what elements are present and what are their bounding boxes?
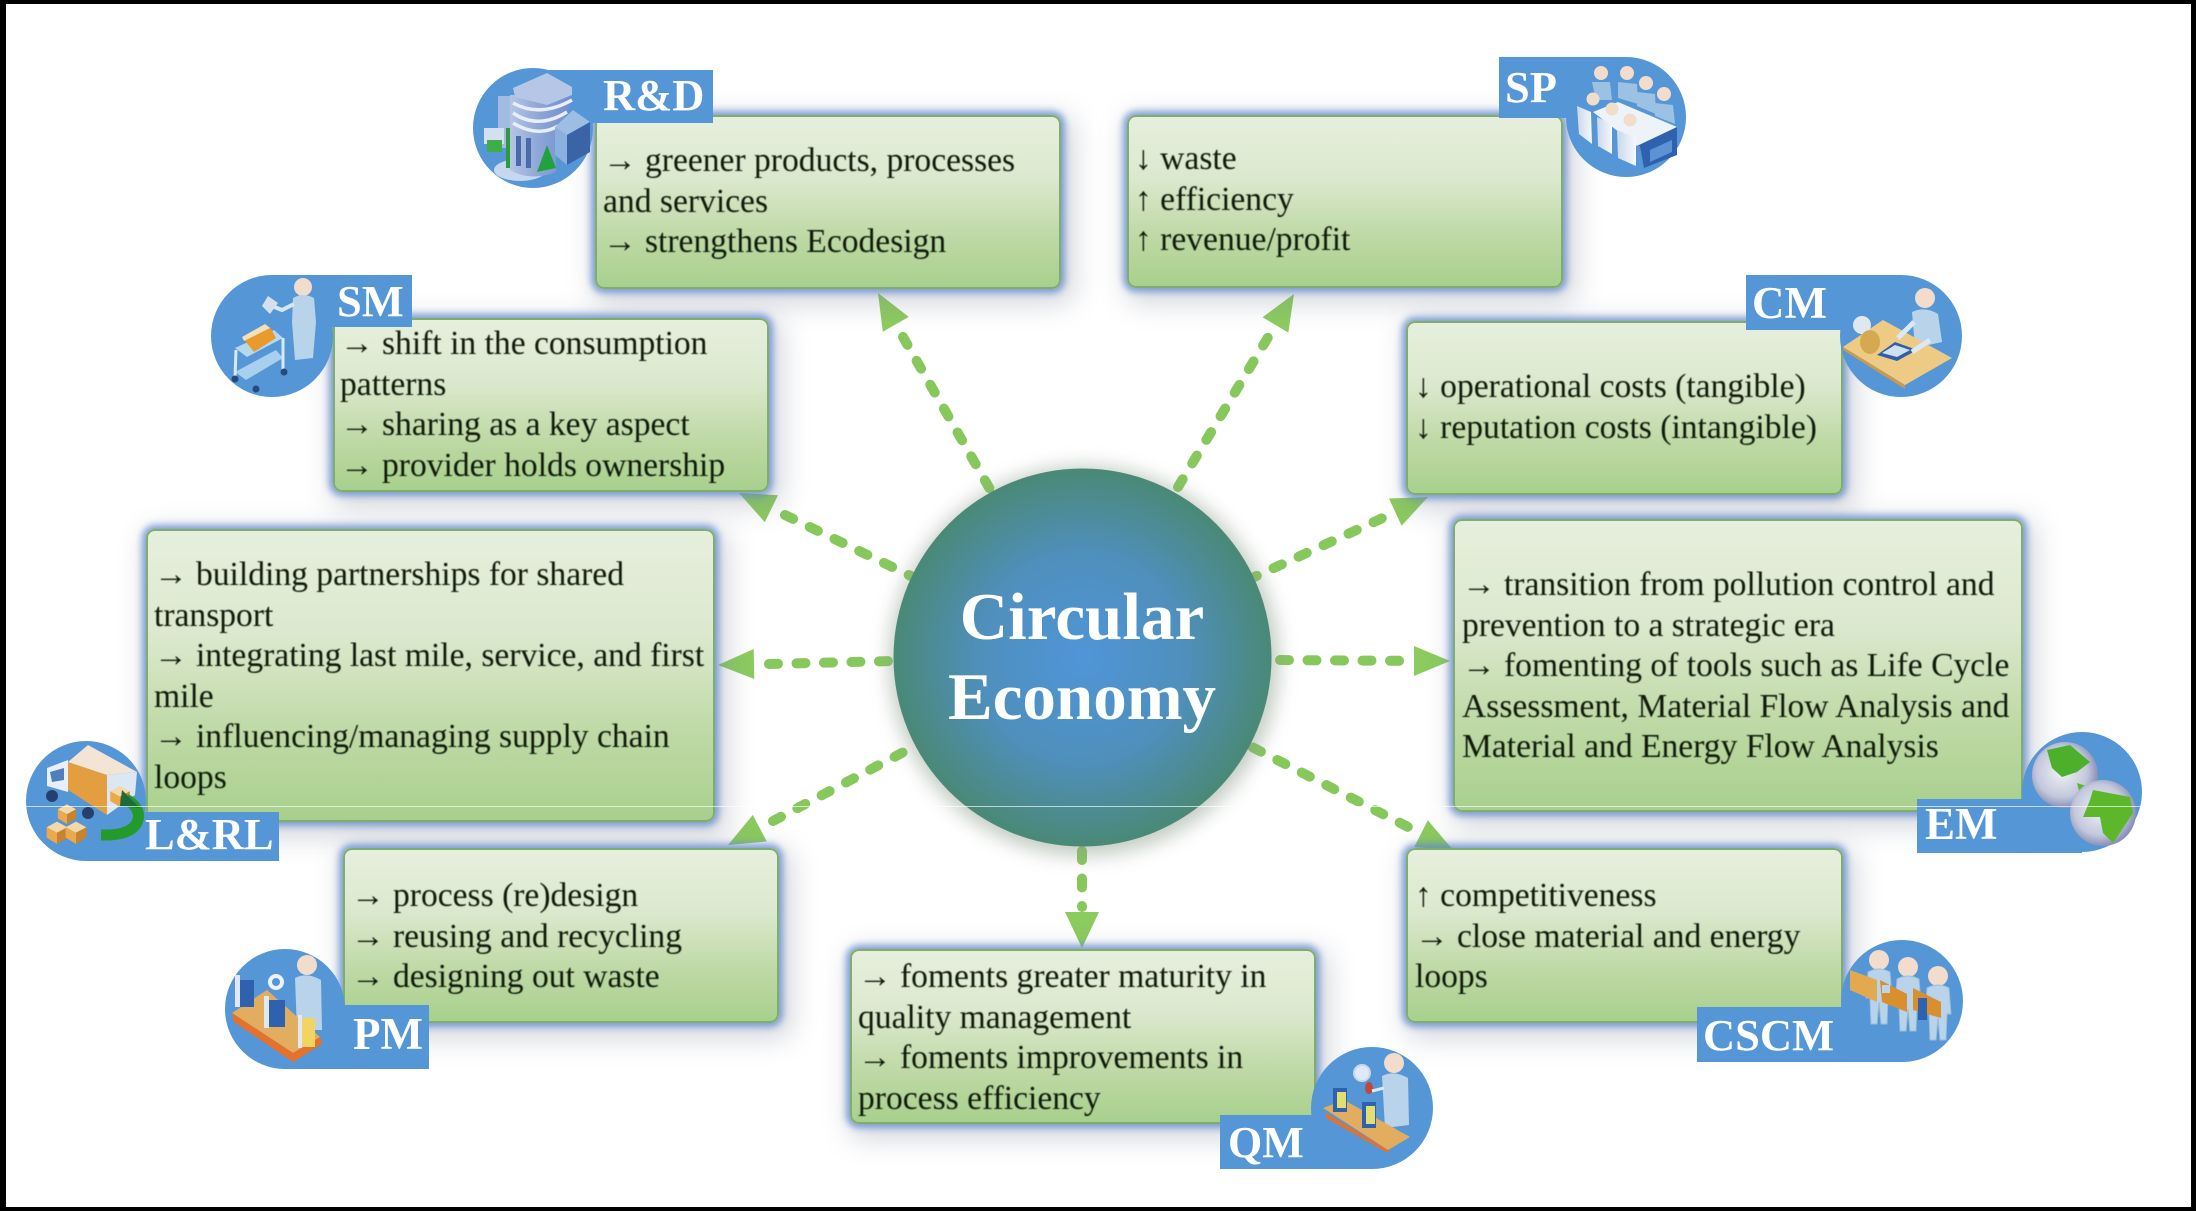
text: SM effects: patterns xyxy=(340,366,446,403)
panel: R&D xyxy=(595,115,1061,289)
text: R&D effects: and services xyxy=(603,183,768,220)
panel: EM xyxy=(1453,519,2023,812)
text: EM effects: → transition from pollution control and xyxy=(1462,566,1995,603)
label: CSCM: CSCM xyxy=(1703,1010,1834,1060)
text: SM effects: → shift in the consumption xyxy=(340,325,707,362)
panel: L&RL xyxy=(146,529,715,822)
text: SP effects: ↑ efficiency xyxy=(1135,181,1294,218)
text: SM effects: → provider holds ownership xyxy=(340,447,725,484)
text: CM effects: ↓ operational costs (tangible) xyxy=(1415,368,1806,405)
centre circle: Circular Economy: Circular xyxy=(960,580,1204,654)
text: L&RL effects: → integrating last mile, service, and first xyxy=(154,637,704,674)
text: PM effects: → process (re)design xyxy=(351,877,638,914)
text: EM effects xyxy=(1462,566,2010,765)
text: CSCM effects: loops xyxy=(1415,958,1488,995)
icon: three people with boxes xyxy=(1850,950,1951,1040)
text: QM effects: quality management xyxy=(858,999,1131,1036)
text: CSCM effects xyxy=(1415,877,1801,995)
icon: meeting table xyxy=(1577,66,1677,168)
panel: PM xyxy=(343,848,779,1023)
text: CSCM effects: ↑ competitiveness xyxy=(1415,877,1657,914)
text: QM effects xyxy=(858,958,1266,1117)
badge: L&RL xyxy=(26,741,279,861)
badge: SM xyxy=(211,275,412,397)
text: EM effects: Material and Energy Flow Analysis xyxy=(1462,728,1939,765)
icon: office building xyxy=(484,73,590,181)
text: PM effects: → designing out waste xyxy=(351,958,660,995)
text: EM effects: prevention to a strategic era xyxy=(1462,607,1835,644)
label: SP: SP xyxy=(1505,62,1557,112)
icon: production line xyxy=(232,955,322,1062)
icon: two globes xyxy=(2032,742,2136,846)
badge: QM xyxy=(1220,1047,1433,1169)
text: EM effects: → fomenting of tools such as Life Cycle xyxy=(1462,647,2009,684)
text: CM effects: ↓ reputation costs (intangible) xyxy=(1415,409,1817,446)
panel: CM xyxy=(1406,321,1843,495)
icon: truck and return loop xyxy=(46,745,140,844)
label: QM: QM xyxy=(1228,1118,1304,1167)
panel: SP xyxy=(1127,115,1563,288)
text: SP effects: ↓ waste xyxy=(1135,140,1237,177)
text: PM effects: → reusing and recycling xyxy=(351,918,682,955)
badge: CSCM xyxy=(1697,940,1963,1062)
text: PM effects xyxy=(351,877,682,995)
text: QM effects: process efficiency xyxy=(858,1080,1101,1117)
text: R&D effects: → strengthens Ecodesign xyxy=(603,223,946,260)
panel: QM xyxy=(850,949,1316,1124)
label: PM: PM xyxy=(353,1009,423,1059)
label: CM: CM xyxy=(1752,278,1827,328)
panel: CSCM xyxy=(1406,848,1843,1023)
text: L&RL effects: → building partnerships for shared xyxy=(154,556,624,593)
icon: service cart xyxy=(232,278,316,392)
badge: SP xyxy=(1499,57,1686,177)
text: L&RL effects: loops xyxy=(154,759,227,796)
label: L&RL: L&RL xyxy=(145,809,274,859)
text: EM effects: Assessment, Material Flow Analysis and xyxy=(1462,688,2009,725)
panel: SM xyxy=(333,318,769,492)
text: L&RL effects: → influencing/managing supply chain xyxy=(154,718,670,755)
text: L&RL effects xyxy=(154,556,705,796)
text: SM effects xyxy=(340,325,725,484)
icon: cost management desk xyxy=(1843,288,1952,389)
text: CSCM effects: → close material and energy xyxy=(1415,918,1800,955)
badge: PM xyxy=(225,949,429,1069)
text: SM effects: → sharing as a key aspect xyxy=(340,406,690,443)
label: R&D: R&D xyxy=(603,70,704,120)
label: SM: SM xyxy=(337,276,404,326)
text: SP effects: ↑ revenue/profit xyxy=(1135,221,1350,258)
icon: quality inspection xyxy=(1323,1053,1410,1152)
badge: R&D xyxy=(473,68,713,188)
badge: CM xyxy=(1746,275,1962,397)
text: SP effects xyxy=(1135,140,1351,258)
text: R&D effects: → greener products, processes xyxy=(603,142,1015,179)
label: EM: EM xyxy=(1925,799,1998,849)
text: L&RL effects: mile xyxy=(154,678,214,715)
badge: EM xyxy=(1917,732,2142,853)
text: R&D effects xyxy=(603,142,1015,260)
text: L&RL effects: transport xyxy=(154,597,273,634)
centre circle: Circular Economy: Economy xyxy=(948,660,1216,734)
text: QM effects: → foments improvements in xyxy=(858,1039,1243,1076)
text: CM effects xyxy=(1415,368,1817,446)
text: QM effects: → foments greater maturity in xyxy=(858,958,1266,995)
